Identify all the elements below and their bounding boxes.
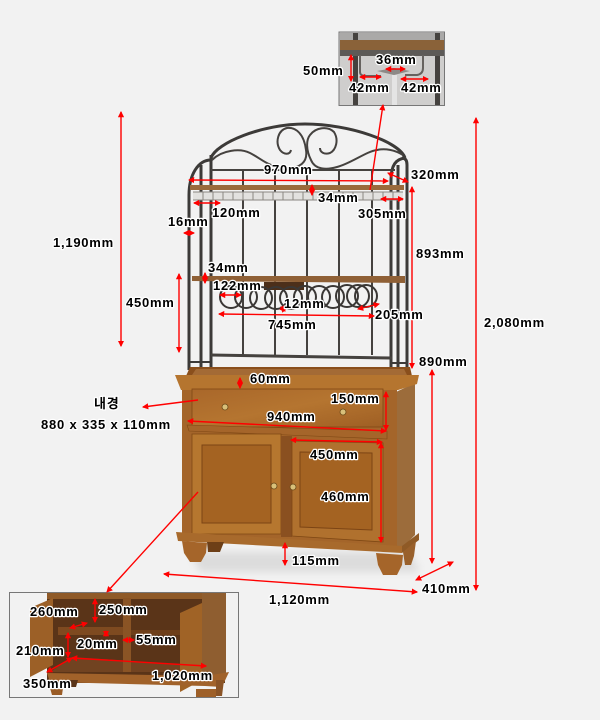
dimension arrows: [47, 55, 476, 672]
rack horizontal rails and bars: [211, 170, 395, 358]
inset feet: [50, 688, 63, 695]
dimension labels: 305mm: [358, 206, 407, 221]
furniture: wooden cabinet: [175, 367, 419, 575]
left door open: [30, 598, 53, 677]
dimension labels: 1,020mm: [152, 668, 213, 683]
interior back: [47, 593, 225, 683]
right door open: [180, 603, 202, 692]
dimension labels: 460mm: [321, 489, 370, 504]
tray top: [186, 367, 412, 376]
dimension labels: 893mm: [416, 246, 465, 261]
dimension labels: 450mm: [310, 447, 359, 462]
base: [176, 532, 402, 553]
leader lines: [107, 105, 383, 592]
dimension labels: 34mm: [318, 190, 359, 205]
dimension labels: 36mm: [376, 52, 417, 67]
detail inset: glass holder: [339, 32, 444, 106]
drawer: [192, 389, 383, 427]
dimension labels: 260mm: [30, 604, 79, 619]
dimension labels: 115mm: [292, 553, 340, 568]
dimension labels: 970mm: [264, 162, 313, 177]
wine rings: [220, 282, 377, 309]
top moulding: [175, 375, 419, 390]
dimension labels: 350mm: [23, 676, 72, 691]
rack arch and scrollwork: [211, 124, 405, 169]
upper shelf: [190, 185, 404, 190]
cabinet front: [182, 385, 397, 548]
dimension labels: 1,120mm: [269, 592, 330, 607]
dimension labels: 940mm: [267, 409, 316, 424]
dimension labels: 16mm: [168, 214, 209, 229]
dimension labels: 34mm: [208, 260, 249, 275]
dimension labels: 50mm: [303, 63, 344, 78]
dimension labels: 150mm: [331, 391, 380, 406]
cabinet shadow: [190, 552, 420, 572]
left door: [192, 434, 281, 534]
dimension labels: 745mm: [268, 317, 317, 332]
dimension labels: 205mm: [375, 307, 424, 322]
lower shelf: [192, 276, 405, 283]
inset photo: cabinet interior: [10, 592, 238, 698]
dimension labels: 20mm: [77, 636, 118, 651]
dimension labels: 410mm: [422, 581, 471, 596]
glass rack: [193, 192, 403, 200]
dimension labels: 320mm: [411, 167, 460, 182]
dimension labels: 1,190mm: [53, 235, 114, 250]
dimension labels: 122mm: [213, 278, 262, 293]
center stile: [281, 436, 292, 537]
divider: [123, 598, 131, 672]
inner shelf: [58, 627, 123, 635]
dimension labels: 12mm: [284, 296, 325, 311]
dimension labels: 890mm: [419, 354, 468, 369]
dimension labels: 42mm: [401, 80, 442, 95]
base: [47, 672, 229, 687]
dimension labels: 120mm: [212, 205, 261, 220]
dimension labels: 210mm: [16, 643, 65, 658]
right door: [290, 441, 383, 542]
dimension labels: 450mm: [126, 295, 175, 310]
lower floor: [50, 657, 190, 672]
mid moulding: [187, 425, 387, 439]
dimension labels: 60mm: [250, 371, 291, 386]
dimension labels: 내경: [94, 396, 119, 411]
dimension labels: 42mm: [349, 80, 390, 95]
dimension labels: [16, 52, 545, 691]
dimension labels: 2,080mm: [484, 315, 545, 330]
rack uprights: [189, 155, 407, 370]
dimension labels: 55mm: [136, 632, 177, 647]
cabinet side: [396, 383, 415, 548]
dimension labels: 880 x 335 x 110mm: [41, 417, 171, 432]
right side panel: [202, 593, 226, 678]
furniture: iron rack upper section: [189, 124, 407, 370]
dimension labels: 250mm: [99, 602, 148, 617]
feet: [182, 541, 416, 575]
